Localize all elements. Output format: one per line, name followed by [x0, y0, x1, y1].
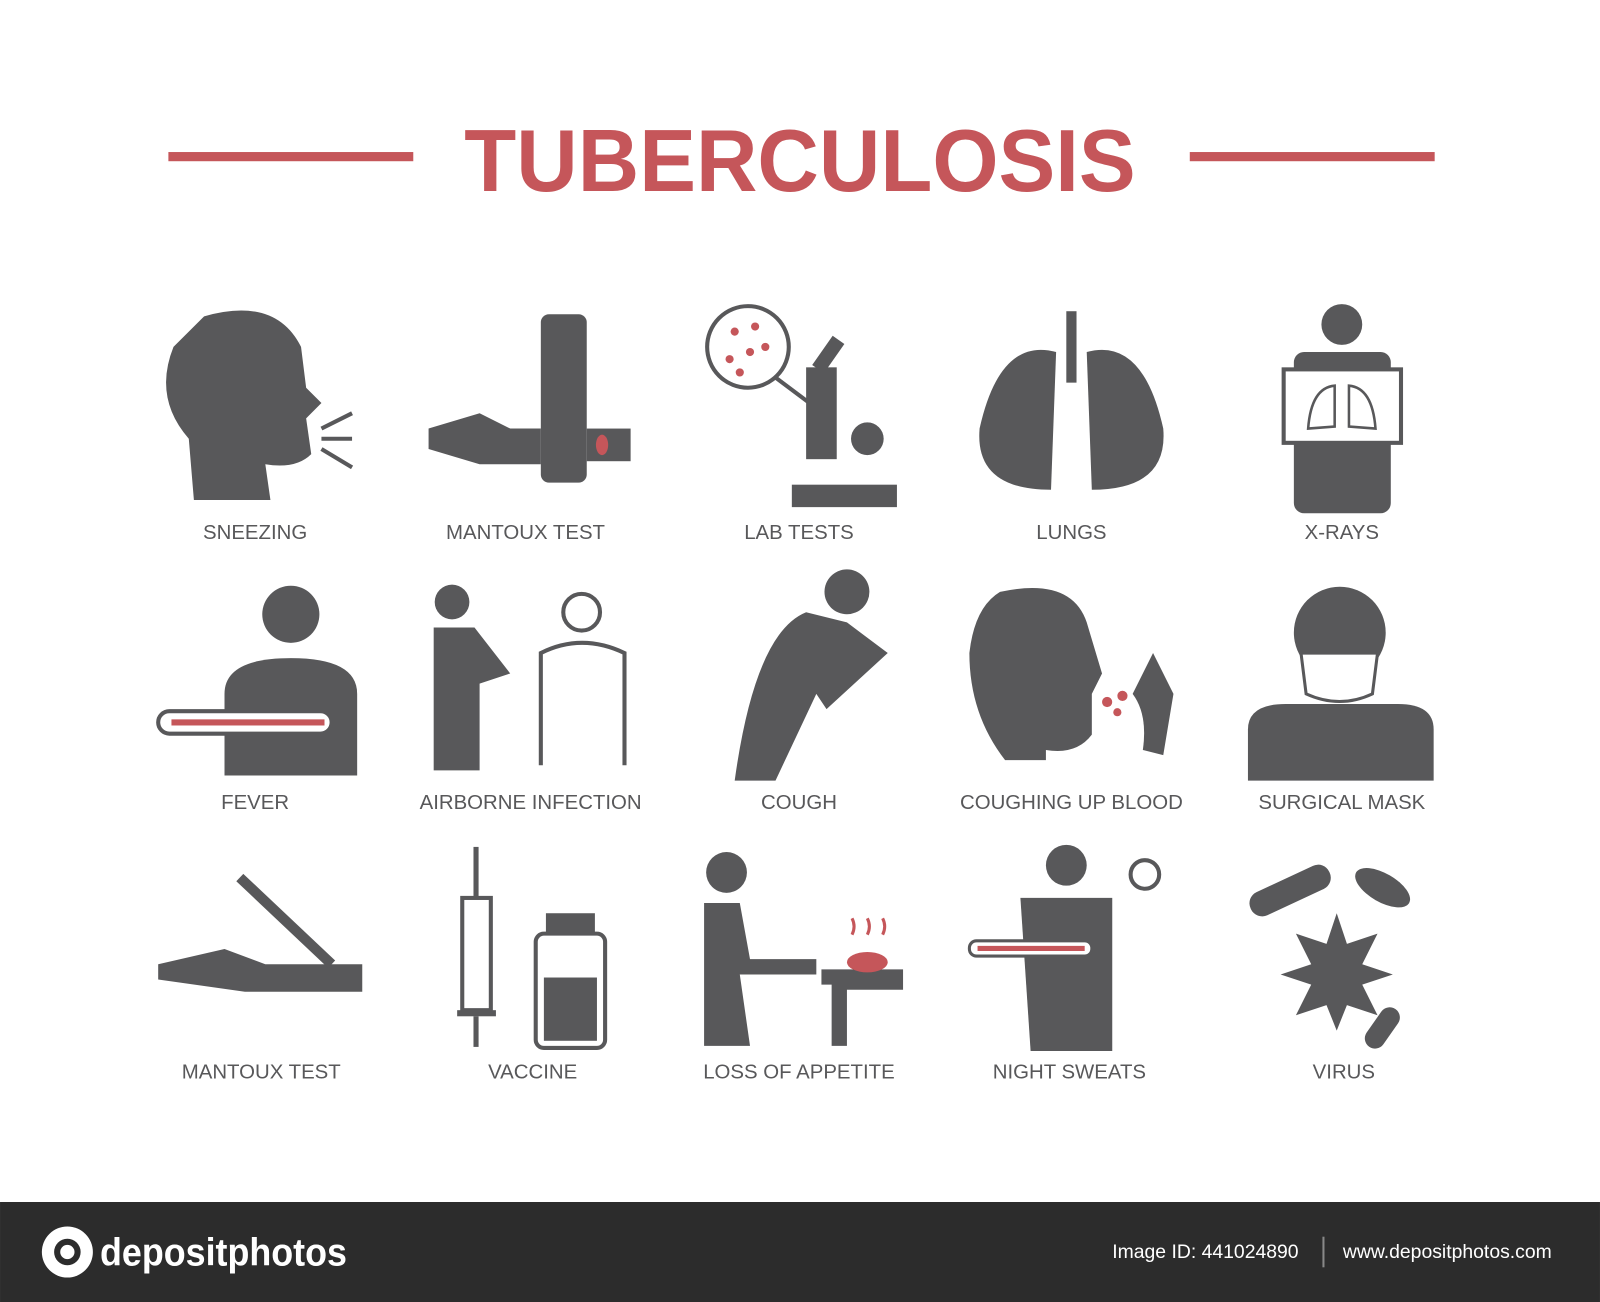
icon: cough	[735, 569, 888, 781]
labels: MANTOUX TEST	[446, 522, 605, 544]
footer bar: depositphotos	[100, 1231, 347, 1274]
labels: LAB TESTS	[744, 522, 854, 544]
footer bar	[0, 1202, 1600, 1302]
icon: lungs	[979, 311, 1164, 490]
labels: FEVER	[221, 792, 289, 814]
icon: mantoux test injection	[158, 878, 362, 992]
icon: virus	[1245, 860, 1416, 1053]
labels: SNEEZING	[203, 522, 307, 544]
icon: airborne infection	[434, 585, 624, 770]
title: TUBERCULOSIS	[464, 112, 1136, 210]
labels	[182, 522, 1426, 1084]
icon: fever	[158, 586, 357, 775]
labels: LOSS OF APPETITE	[703, 1062, 895, 1084]
labels: VIRUS	[1313, 1062, 1375, 1084]
icon: surgical mask	[1248, 587, 1434, 781]
labels: COUGHING UP BLOOD	[960, 792, 1183, 814]
icon: night sweats	[969, 845, 1159, 1051]
labels: LUNGS	[1036, 522, 1107, 544]
labels: SURGICAL MASK	[1258, 792, 1426, 814]
footer bar: Image ID: 441024890	[1112, 1241, 1299, 1263]
title	[168, 112, 1435, 210]
labels: X-RAYS	[1305, 522, 1379, 544]
icon: vaccine	[457, 847, 605, 1048]
labels: NIGHT SWEATS	[993, 1062, 1146, 1084]
footer bar: www.depositphotos.com	[1342, 1241, 1552, 1263]
icon: sneezing	[166, 310, 352, 500]
labels: VACCINE	[488, 1062, 577, 1084]
labels: COUGH	[761, 792, 837, 814]
labels: MANTOUX TEST	[182, 1062, 341, 1084]
icon: mantoux test	[429, 314, 631, 483]
icon: coughing up blood	[969, 588, 1173, 760]
icon: x-rays	[1284, 304, 1401, 513]
icon: lab tests	[707, 306, 897, 507]
labels: AIRBORNE INFECTION	[420, 792, 642, 814]
icon: loss of appetite	[704, 852, 903, 1046]
